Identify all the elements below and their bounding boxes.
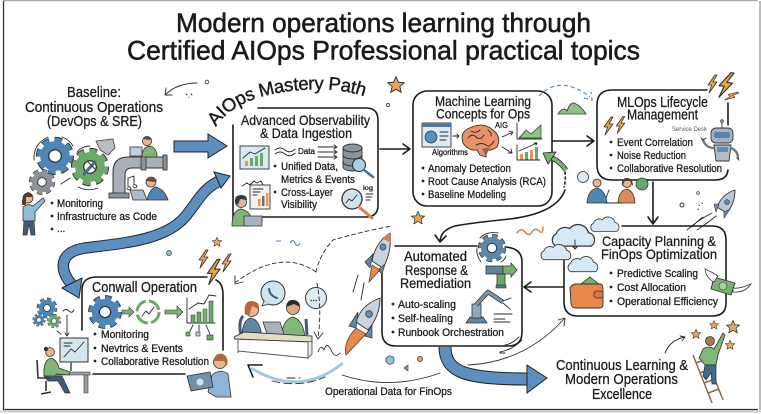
icon: lightning left <box>604 116 625 135</box>
mlops bullets <box>610 137 722 175</box>
arrow: curved blue loop <box>62 172 230 298</box>
observability heading: & Data Ingestion <box>260 125 352 141</box>
capacity heading: Capacity Planning & <box>602 233 717 249</box>
heading: continuous learning: Modern Operations <box>565 371 678 388</box>
panel: machine learning <box>413 91 552 206</box>
automated bullets: Auto-scaling <box>398 299 456 311</box>
heading: continuous learning <box>556 357 688 403</box>
decorative stars and dots <box>167 77 425 371</box>
arrow: mlops to capacity <box>648 182 658 224</box>
observability bullets: Cross-Layer <box>281 187 333 199</box>
arrow: observability to machine learning <box>380 144 410 154</box>
AIG label and arrows: AIG <box>495 121 508 130</box>
machine learning bullets: Anomaly Detection <box>428 163 511 175</box>
icon: t-pipe with arrow <box>486 263 517 288</box>
title: Certified AIOps Professional practical topics <box>127 36 640 66</box>
automated border <box>382 246 522 346</box>
arrow: blue swoosh under meeting <box>248 363 343 384</box>
icon: algorithm window: Algorithms <box>432 148 468 157</box>
capacity border <box>564 226 726 316</box>
icon: engineer with laptop, top <box>130 136 157 157</box>
icon: data flow: Data <box>298 147 316 156</box>
observability bullets <box>274 161 355 211</box>
arrow: big blue to continuous learning <box>445 347 547 393</box>
title <box>127 8 640 66</box>
icon: woman turning gear <box>22 192 45 235</box>
icon: report <box>242 181 270 209</box>
icon: clock gear <box>477 233 506 262</box>
heading: mastery path: AIOps Mastery Path <box>209 76 366 128</box>
automated heading: Automated <box>404 248 467 264</box>
machine learning bullets <box>422 163 546 201</box>
mlops bullets: Event Correlation <box>617 137 693 149</box>
icon: log magnifier <box>342 186 373 218</box>
arrow: baseline to observability <box>174 134 227 158</box>
icon: process flow <box>92 299 183 325</box>
heading: continuous learning: Excellence <box>592 386 652 403</box>
icon: robot <box>701 120 739 161</box>
panel: baseline <box>22 84 168 235</box>
icon: woman with laptop <box>232 195 262 226</box>
conwall heading: Conwall Operation <box>92 279 197 296</box>
baseline bullets: ... <box>57 224 65 235</box>
baseline heading: Baseline: <box>67 84 121 101</box>
machine learning heading <box>435 93 531 122</box>
icon: green line chart <box>517 123 542 139</box>
icon: orange squiggle <box>517 227 543 234</box>
panel: conwall operation <box>82 277 223 374</box>
observability border <box>233 108 378 220</box>
icon: team meeting at desk: ... <box>310 293 318 303</box>
capacity bullets: Cost Allocation <box>617 282 686 294</box>
automated heading: Remediation <box>400 275 471 291</box>
observability heading <box>241 112 370 141</box>
automated heading <box>400 248 471 291</box>
icon: lightning top <box>708 71 739 104</box>
machine learning border <box>413 91 552 206</box>
service desk label: Service Desk <box>672 126 708 133</box>
icon: brain <box>462 125 499 157</box>
mlops border <box>597 90 728 180</box>
capacity bullets <box>610 268 718 308</box>
capacity heading: FinOps Optimization <box>601 246 717 262</box>
baseline bullets <box>51 198 157 235</box>
icon: data flow <box>275 145 337 159</box>
arrow: long line to automated response <box>564 172 565 187</box>
title: Modern operations learning through <box>176 8 591 38</box>
icon: pipe <box>96 139 167 198</box>
label: operational data: Operational Data for FinOps <box>325 386 452 398</box>
capacity heading <box>601 233 717 262</box>
arrow: small return arrow top <box>165 80 209 98</box>
panel: automated response <box>382 233 522 346</box>
icon: conwall chart <box>186 295 216 340</box>
conwall bullets: Nevtrics & Events <box>101 343 183 355</box>
icon: winged money <box>705 269 751 295</box>
mlops heading: MLOps Lifecycle <box>617 94 708 111</box>
icon: engineer with laptop, bottom <box>130 177 168 200</box>
mlops heading <box>617 94 708 124</box>
icon: dashboard chart <box>240 146 269 169</box>
icon: clouds <box>541 217 619 272</box>
icon: robot arm <box>466 292 512 323</box>
machine learning bullets: Root Cause Analysis (RCA) <box>428 176 546 188</box>
icon: team meeting at desk <box>234 281 326 358</box>
arrow: capacity to automated <box>524 282 563 292</box>
capacity bullets: Operational Efficiency <box>617 296 718 308</box>
icon: person on ladder with stars <box>665 320 740 403</box>
automated bullets: Runbook Orchestration <box>398 327 504 339</box>
icon: wallet <box>570 277 603 308</box>
conwall bullets <box>94 329 209 368</box>
baseline bullets: Infrastructure as Code <box>57 211 157 223</box>
panel: observability <box>232 108 378 226</box>
icon: support people with phones <box>578 172 648 203</box>
mlops heading: Management <box>627 106 699 124</box>
icon: green hill <box>558 103 586 114</box>
observability bullets: Visibility <box>281 199 317 211</box>
conwall border <box>82 277 223 374</box>
arrow: machine learning to mlops <box>553 136 594 146</box>
icon: rockets <box>318 233 391 355</box>
machine learning heading: Machine Learning <box>435 93 531 109</box>
icon: lightning conwall <box>199 250 231 285</box>
icon: gears <box>32 137 105 192</box>
arrow: green return arrow <box>543 152 566 170</box>
baseline heading: (DevOps & SRE) <box>47 113 142 130</box>
icon: rocket top right <box>680 190 735 230</box>
observability bullets: Unified Data, <box>281 161 338 173</box>
arrow: thin curve to capacity <box>468 318 565 365</box>
observability bullets: Metrics & Events <box>281 174 355 186</box>
baseline bullets: Monitoring <box>57 198 103 210</box>
conwall bullets: Collaborative Resolution <box>101 356 209 368</box>
machine learning bullets: Baseline Modeling <box>428 189 506 201</box>
icon: bar chart <box>517 143 540 160</box>
automated bullets <box>392 299 504 339</box>
mlops bullets: Noise Reduction <box>617 150 686 162</box>
arrow: dashed loops around meeting <box>235 226 392 339</box>
capacity bullets: Predictive Scaling <box>617 268 698 280</box>
conwall bullets: Monitoring <box>101 329 149 341</box>
panel: capacity planning <box>541 217 751 316</box>
label: operational data <box>325 373 452 398</box>
machine learning heading: Concepts for Ops <box>436 106 530 122</box>
arrow: dashed blue arc <box>539 85 592 100</box>
icon: database with magnifier <box>343 144 373 177</box>
baseline heading: Continuous Operations <box>25 99 163 116</box>
mlops bullets: Collaborative Resolution <box>617 163 722 175</box>
panel: mlops <box>597 71 739 180</box>
icon: man with tablet <box>187 354 231 397</box>
icon: log magnifier: log <box>363 186 373 192</box>
icon: operator at desk <box>34 300 90 394</box>
heading: continuous learning: Continuous Learning & <box>556 357 688 374</box>
automated heading: Response & <box>405 262 469 278</box>
automated bullets: Self-healing <box>398 313 453 325</box>
baseline heading <box>25 84 163 130</box>
observability heading: Advanced Observability <box>241 112 370 128</box>
